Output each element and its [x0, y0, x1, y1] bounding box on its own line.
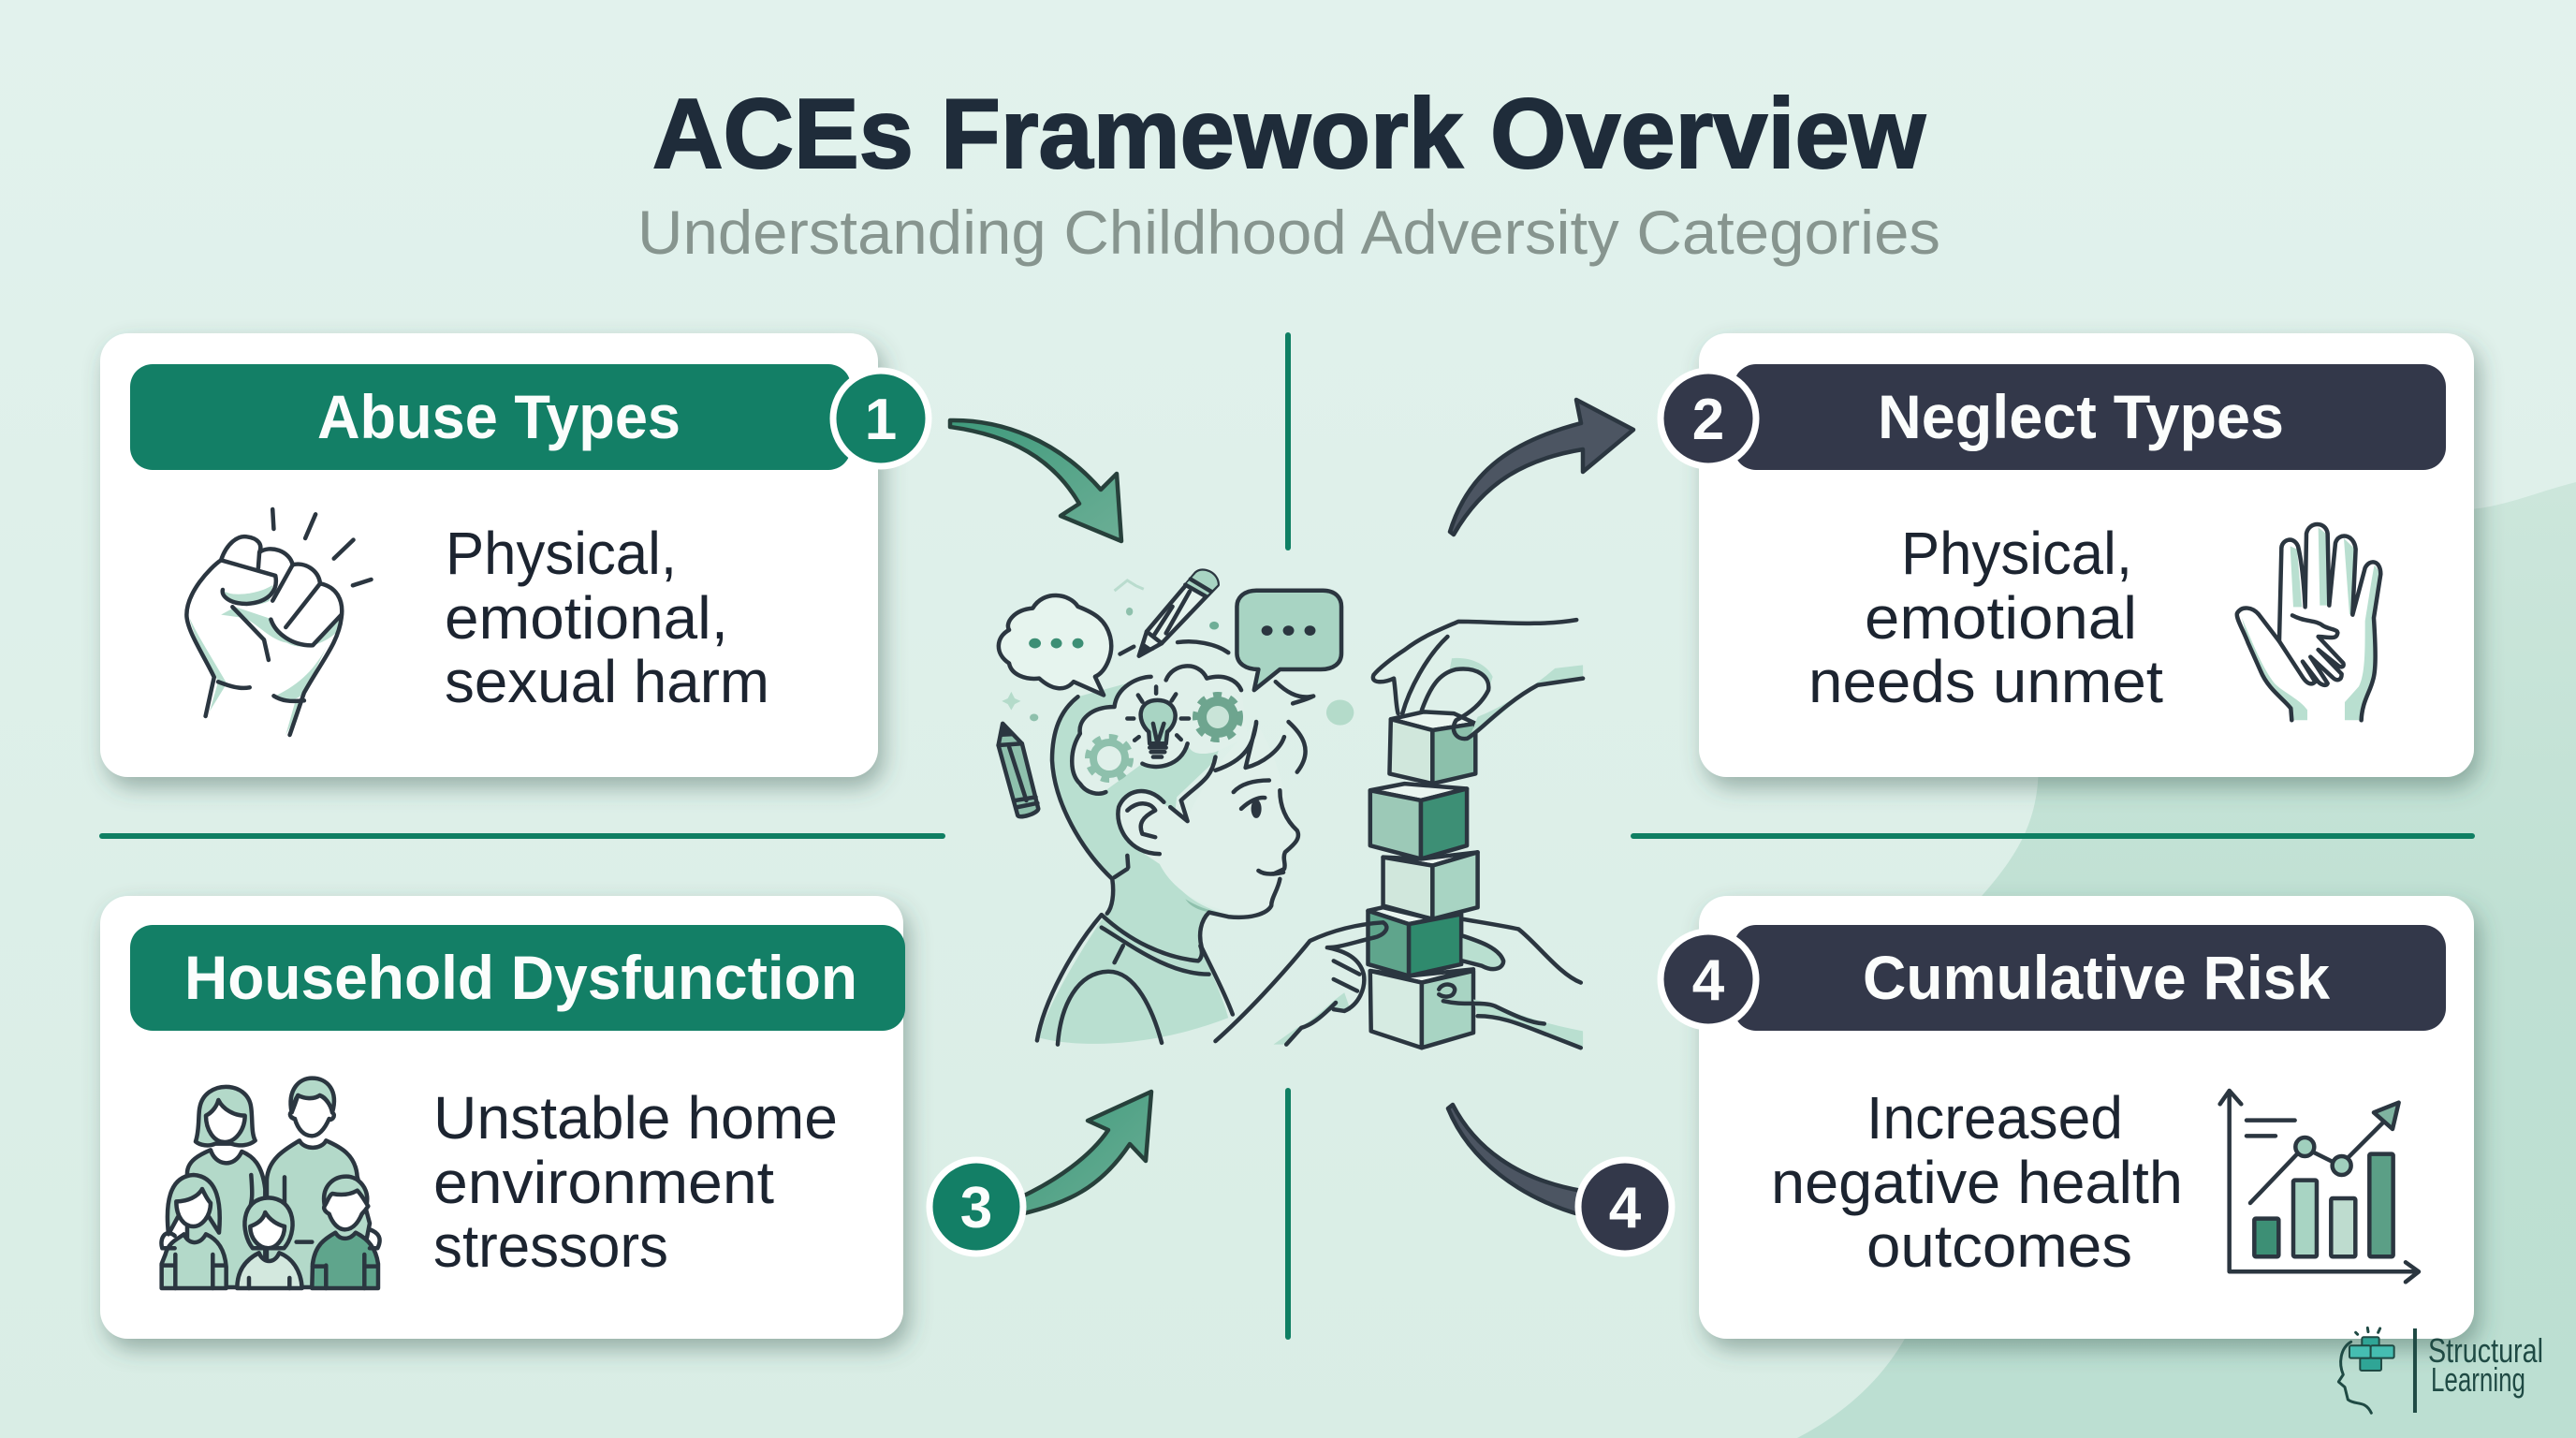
text: risk description: Increased	[1866, 1084, 2123, 1152]
number badge 3: 3	[960, 1176, 992, 1240]
gears	[1088, 695, 1240, 780]
text: risk description: negative health	[1771, 1149, 2183, 1216]
arrow 2: centre to neglect	[1450, 400, 1633, 535]
number badge 2	[1661, 371, 1756, 466]
heading bar: cumulative risk: Cumulative Risk	[1863, 943, 2330, 1012]
heading bar: neglect types	[1734, 364, 2446, 470]
small decorations	[1002, 580, 1354, 726]
text: household description: environment	[433, 1149, 774, 1216]
square speech bubble	[1237, 591, 1341, 690]
child outline	[1037, 666, 1313, 1045]
arrow 4: centre to cumulative risk	[1448, 1105, 1582, 1215]
heading bar: neglect types: Neglect Types	[1878, 382, 2284, 451]
arrow 3: household to centre	[1020, 1092, 1151, 1214]
central illustration: child and blocks	[999, 571, 1583, 1048]
panel: household dysfunction	[100, 896, 905, 1339]
text: risk description	[1771, 1084, 2183, 1280]
number badge 2: 2	[1692, 388, 1724, 452]
text: abuse description: emotional,	[445, 584, 728, 652]
title: ACEs Framework Overview	[652, 79, 1926, 189]
hands around blocks	[1215, 620, 1583, 1048]
logo: Structural Learning	[2338, 1328, 2543, 1413]
number badge 4 lower	[1578, 1160, 1672, 1254]
text: abuse description: Physical,	[446, 520, 677, 587]
subtitle: Understanding Childhood Adversity Categories	[637, 198, 1940, 267]
light bulb	[1127, 687, 1189, 757]
logo head mark	[2338, 1328, 2415, 1413]
text: neglect description: needs unmet	[1808, 648, 2163, 715]
heading bar: cumulative risk	[1734, 925, 2446, 1031]
icon: family	[161, 1078, 380, 1288]
number badge 4: 4	[1692, 948, 1725, 1013]
number badge 4 lower: 4	[1609, 1176, 1642, 1240]
text: neglect description	[1808, 520, 2163, 715]
number badge 1: 1	[865, 388, 897, 452]
heading bar: household dysfunction: Household Dysfunction	[184, 943, 857, 1012]
child figures	[161, 1175, 380, 1288]
cloud thought bubble	[999, 595, 1111, 695]
logo: Structural Learning: Learning	[2431, 1360, 2525, 1399]
block stack	[1368, 712, 1478, 1048]
heading bar: abuse types: Abuse Types	[317, 382, 681, 451]
text: abuse description	[445, 520, 769, 715]
heading bar: household dysfunction	[130, 925, 905, 1031]
arrow 1: abuse to centre	[950, 420, 1121, 541]
left pencil	[999, 724, 1038, 816]
panel: neglect types	[1661, 333, 2474, 777]
number badge 3	[929, 1160, 1023, 1254]
text: household description: Unstable home	[433, 1084, 838, 1152]
text: neglect description: emotional	[1865, 584, 2137, 652]
text: neglect description: Physical,	[1901, 520, 2132, 587]
text: household description: stressors	[433, 1212, 668, 1280]
panel: cumulative risk	[1661, 896, 2474, 1339]
text: household description	[433, 1084, 838, 1280]
icon: rising chart	[2220, 1091, 2419, 1282]
text: abuse description: sexual harm	[445, 648, 769, 715]
number badge 4	[1661, 932, 1756, 1027]
text: risk description: outcomes	[1866, 1212, 2132, 1280]
icon: open hand holding small hand	[2237, 524, 2380, 720]
heading bar: abuse types	[130, 364, 851, 470]
logo: Structural Learning: Structural	[2428, 1331, 2543, 1370]
number badge 1	[833, 371, 929, 466]
icon: raised fist	[186, 509, 372, 735]
divider lines	[102, 335, 2472, 1337]
child hair and torso	[1039, 663, 1298, 1044]
panel: abuse types	[100, 333, 929, 777]
top pencil	[1139, 571, 1218, 656]
